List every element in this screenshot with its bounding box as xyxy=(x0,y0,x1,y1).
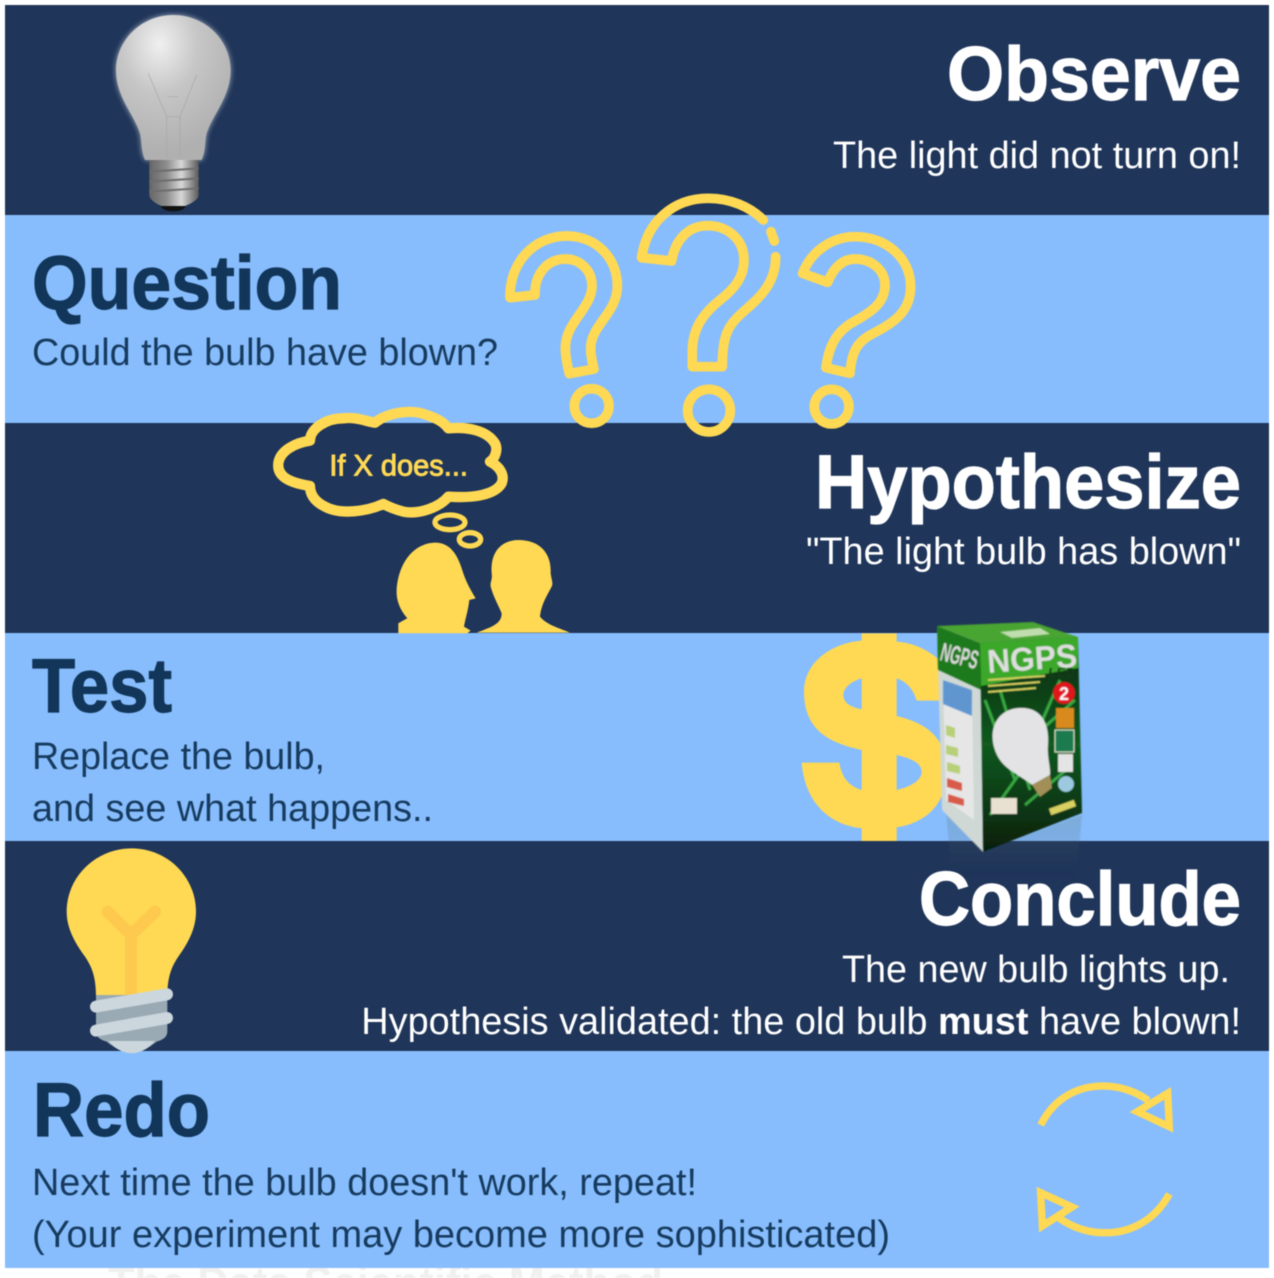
panel: hypothesize band xyxy=(5,423,1269,633)
text: redo description: (Your experiment may become more sophisticated) xyxy=(32,1214,890,1256)
text: hypothesize description: "The light bulb has blown" xyxy=(806,531,1241,573)
text: redo description: Next time the bulb doesn't work, repeat! xyxy=(32,1162,697,1204)
heading: Observe: Observe xyxy=(947,32,1241,117)
icon: repeat cycle arrows xyxy=(1041,1086,1169,1233)
text: conclude description: Hypothesis validated: the old bulb must have blown! xyxy=(361,1001,1241,1043)
text: conclude description xyxy=(361,949,1241,1043)
icon: dollar sign xyxy=(802,633,947,841)
heading: Question: Question xyxy=(32,241,342,326)
panel: test band xyxy=(5,633,1269,841)
text: conclude description: The new bulb lights up. xyxy=(842,949,1230,991)
panel: redo band xyxy=(5,1051,1269,1268)
icon: thinking heads with thought cloud xyxy=(278,412,570,633)
heading: Hypothesize: Hypothesize xyxy=(815,440,1241,525)
text: question description: Could the bulb have blown? xyxy=(32,332,498,374)
heading: Redo: Redo xyxy=(33,1068,210,1153)
text: observe description: The light did not turn on! xyxy=(833,135,1241,177)
panel: observe band xyxy=(5,5,1269,215)
text: test description: Replace the bulb, xyxy=(32,736,325,778)
icon: unlit grey light bulb xyxy=(116,15,231,211)
panel: conclude band xyxy=(5,841,1269,1051)
text: redo description xyxy=(32,1162,890,1256)
heading: Test: Test xyxy=(32,644,172,729)
icon: NGPS LED bulb box: NGPS xyxy=(938,637,982,675)
icon: NGPS LED bulb box: NGPS xyxy=(986,637,1078,680)
text: test description: and see what happens.. xyxy=(32,788,433,830)
icon: NGPS LED bulb box: LED xyxy=(1048,665,1076,680)
text: test description xyxy=(32,736,433,830)
icon: thinking heads with thought cloud: If X does... xyxy=(329,450,468,483)
heading: Conclude: Conclude xyxy=(919,857,1241,942)
icon: lit yellow light bulb xyxy=(67,848,196,1053)
icon: NGPS LED bulb box xyxy=(937,622,1082,880)
icon: three question marks xyxy=(510,198,911,432)
icon: NGPS LED bulb box: 2 xyxy=(1059,684,1069,704)
panel: question band xyxy=(5,215,1269,423)
